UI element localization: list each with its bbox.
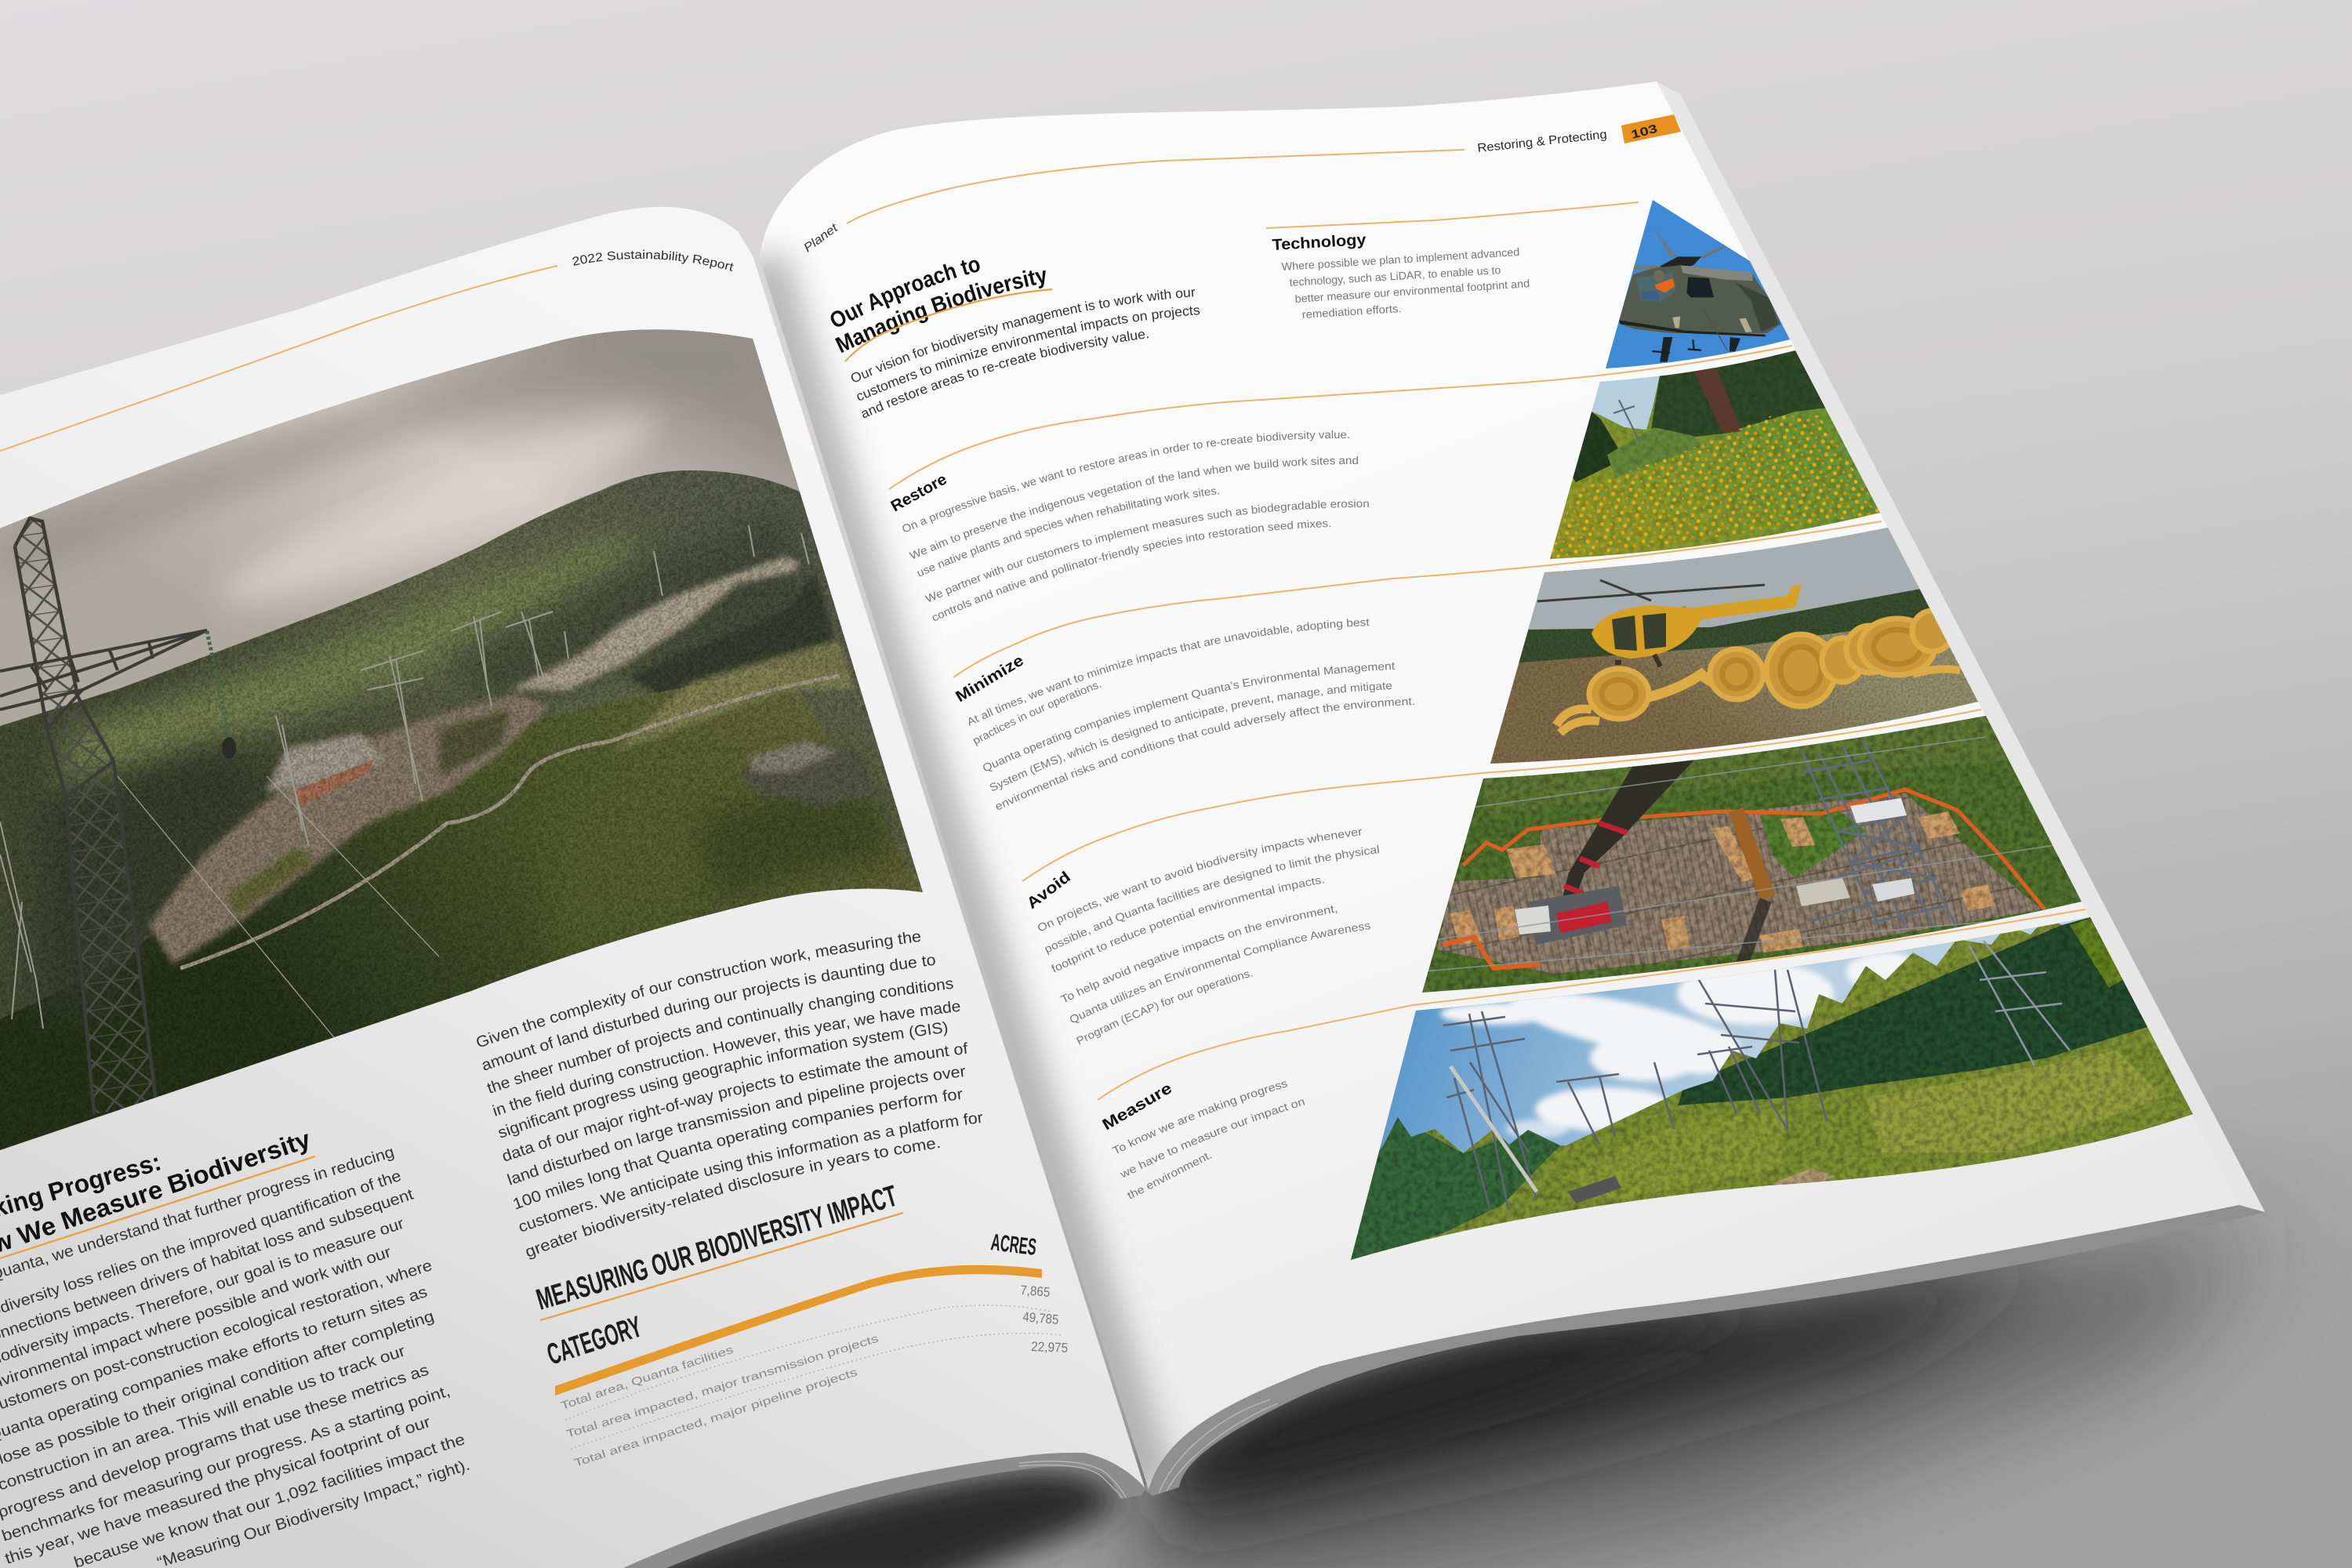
cast shadow beneath the book bbox=[627, 1212, 2265, 1568]
right page block edge and fore-edge bbox=[1145, 82, 2265, 1496]
section: technology bbox=[1266, 202, 1639, 321]
text block: left column: because we know that our 1,092 facilities impact the bbox=[72, 1431, 467, 1568]
page number badge: 103 bbox=[1630, 122, 1659, 142]
section: avoid: Program (ECAP) for our operations. bbox=[1074, 966, 1254, 1047]
intro paragraph: and restore areas to re-create biodiversity value. bbox=[858, 326, 1150, 422]
table: measuring our biodiversity impact: Total area impacted, major pipeline projects bbox=[572, 1366, 858, 1469]
section: avoid: Avoid bbox=[1024, 869, 1074, 913]
steel lattice tower bbox=[1799, 741, 1958, 930]
text block: right column bbox=[474, 928, 984, 1261]
section: restore: use native plants and species when rehabilitating work sites. bbox=[915, 484, 1221, 579]
dark conifers bbox=[1678, 902, 2152, 1105]
section: restore bbox=[888, 346, 1792, 624]
text block: right column: in the field during construction. However, this year, we have made bbox=[492, 1000, 960, 1116]
text block: right column: significant progress using geographic information system (GIS) bbox=[499, 1021, 947, 1138]
section: technology: Where possible we plan to implement advanced bbox=[1281, 245, 1520, 273]
crane boom bbox=[1560, 757, 1697, 909]
text block: right column: amount of land disturbed during our projects is daunting due to bbox=[483, 956, 935, 1070]
text block: right column: the sheer number of projects and continually changing conditions bbox=[487, 980, 953, 1093]
panel: right page bbox=[760, 82, 2239, 1490]
section: restore: We aim to preserve the indigenous vegetation of the land when we build work sites and bbox=[908, 454, 1359, 562]
text block: left column: construction in an area. This will enable us to track our bbox=[0, 1342, 408, 1494]
text block: right column: data of our major right-of-way projects to estimate the amount of bbox=[500, 1040, 969, 1166]
photo: helicopter in blue sky bbox=[1606, 200, 1790, 368]
section: minimize: Minimize bbox=[953, 652, 1027, 706]
table: measuring our biodiversity impact: Total area impacted, major transmission projects bbox=[564, 1332, 880, 1440]
text block: right column: greater biodiversity-related disclosure in years to come. bbox=[523, 1134, 942, 1261]
section: avoid: On projects, we want to avoid biodiversity impacts whenever bbox=[1035, 825, 1363, 935]
text block: left column: progress and develop programs that use these metrics as bbox=[0, 1361, 431, 1522]
section: avoid: possible, and Quanta facilities are designed to limit the physical bbox=[1042, 843, 1381, 956]
section: technology: Technology bbox=[1272, 231, 1367, 254]
section: minimize: At all times, we want to minimize impacts that are unavoidable, adopting best bbox=[965, 615, 1370, 728]
text block: left column: benchmarks for measuring our progress. As a starting point, bbox=[0, 1382, 452, 1545]
text block: left column bbox=[0, 1144, 472, 1568]
orange header bar bbox=[555, 1265, 1042, 1396]
orange silt fence bbox=[1463, 789, 2045, 909]
table: measuring our biodiversity impact bbox=[533, 1180, 1069, 1469]
sky bbox=[0, 329, 800, 726]
section: technology: better measure our environmental footprint and bbox=[1294, 277, 1530, 305]
running header: Restoring and Protecting: Restoring & Protecting bbox=[1477, 128, 1607, 155]
foliage texture bbox=[0, 470, 941, 1160]
column head: category: CATEGORY bbox=[543, 1310, 646, 1372]
crane body bbox=[1529, 886, 1627, 945]
section: minimize: Quanta operating companies implement Quanta’s Environmental Management bbox=[981, 659, 1396, 775]
dirt work areas bbox=[510, 557, 798, 690]
section: measure: we have to measure our impact on bbox=[1117, 1094, 1306, 1181]
section: measure: To know we are making progress bbox=[1110, 1076, 1289, 1157]
section: technology: remediation efforts. bbox=[1301, 302, 1402, 321]
section: minimize: System (EMS), which is designed to anticipate, prevent, manage, and mitigate bbox=[988, 679, 1392, 794]
heading underline bbox=[845, 289, 1052, 361]
sky and clouds bbox=[1333, 894, 2117, 1286]
section: avoid bbox=[1022, 710, 1981, 1047]
table: measuring our biodiversity impact: 22,975 bbox=[1031, 1339, 1069, 1356]
left conifers bbox=[1348, 1117, 1560, 1262]
photo: towers above cleared right-of-way bbox=[1333, 894, 2203, 1286]
heading underline left bbox=[0, 1156, 315, 1258]
photo: aerial crane at transmission tower bbox=[1415, 710, 2085, 1000]
photo: yellow helicopter and coils bbox=[1490, 525, 1984, 768]
text block: left column: this year, we have measured the physical footprint of our bbox=[3, 1414, 433, 1568]
text block: right column: land disturbed on large transmission and pipeline projects over bbox=[505, 1063, 967, 1189]
section: restore: On a progressive basis, we want to restore areas in order to re-create biodiversity value. bbox=[900, 428, 1350, 535]
section: minimize bbox=[953, 521, 1882, 813]
table: measuring our biodiversity impact: 49,785 bbox=[1022, 1309, 1059, 1327]
towers bbox=[1443, 941, 2070, 1210]
cable coils bbox=[1556, 611, 1960, 733]
text block: left column: customers on post-construction ecological restoration, where bbox=[0, 1257, 434, 1416]
section: measure: the environment. bbox=[1125, 1148, 1214, 1202]
heading: our approach: Managing Biodiversity bbox=[832, 263, 1049, 358]
section: minimize: practices in our operations. bbox=[971, 677, 1103, 747]
intro paragraph: customers to minimize environmental impacts on projects bbox=[854, 303, 1200, 405]
section: minimize: environmental risks and conditions that could adversely affect the environment. bbox=[993, 695, 1415, 813]
small towers bbox=[0, 525, 809, 1029]
intro paragraph: Our vision for biodiversity management is to work with our bbox=[848, 285, 1196, 387]
section: restore: Restore bbox=[888, 470, 950, 515]
table title: MEASURING OUR BIODIVERSITY IMPACT bbox=[533, 1180, 901, 1317]
text block: right column: customers. We anticipate using this information as a platform for bbox=[516, 1109, 984, 1236]
column head: acres: ACRES bbox=[989, 1229, 1038, 1261]
row values: 7,865 bbox=[1020, 1283, 1051, 1300]
section: measure: Measure bbox=[1099, 1080, 1175, 1134]
section: measure bbox=[1098, 909, 2085, 1202]
section: avoid: To help avoid negative impacts on the environment, bbox=[1058, 902, 1338, 1006]
left page block edge bbox=[623, 1453, 1146, 1568]
running header: report title: 2022 Sustainability Report bbox=[572, 249, 734, 271]
section: avoid: Quanta utilizes an Environmental Compliance Awareness bbox=[1067, 919, 1371, 1026]
section: technology: technology, such as LiDAR, to enable us to bbox=[1289, 263, 1501, 289]
page number badge bbox=[1621, 114, 1681, 143]
text block: right column: Given the complexity of our construction work, measuring the bbox=[477, 931, 920, 1047]
section: restore: controls and native and pollinator-friendly species into restoration seed mixes. bbox=[930, 517, 1332, 624]
heading: our approach: Our Approach to bbox=[826, 252, 983, 334]
header rule left page bbox=[0, 266, 557, 451]
panel: left page bbox=[0, 207, 1145, 1568]
section: avoid: footprint to reduce potential environmental impacts. bbox=[1049, 873, 1326, 975]
row labels: Total area, Quanta facilities bbox=[559, 1343, 735, 1412]
header rule right page bbox=[847, 150, 1465, 223]
photo: wildflower meadow bbox=[1544, 345, 1889, 564]
timber pole bbox=[1736, 810, 1768, 898]
photo: hillside with transmission towers bbox=[0, 314, 941, 1160]
section label: Planet: Planet bbox=[801, 221, 840, 255]
text block: right column: 100 miles long that Quanta operating companies perform for bbox=[510, 1086, 964, 1214]
big lattice tower bbox=[15, 518, 156, 1114]
section: restore: We partner with our customers to implement measures such as biodegradable erosion bbox=[924, 497, 1370, 605]
